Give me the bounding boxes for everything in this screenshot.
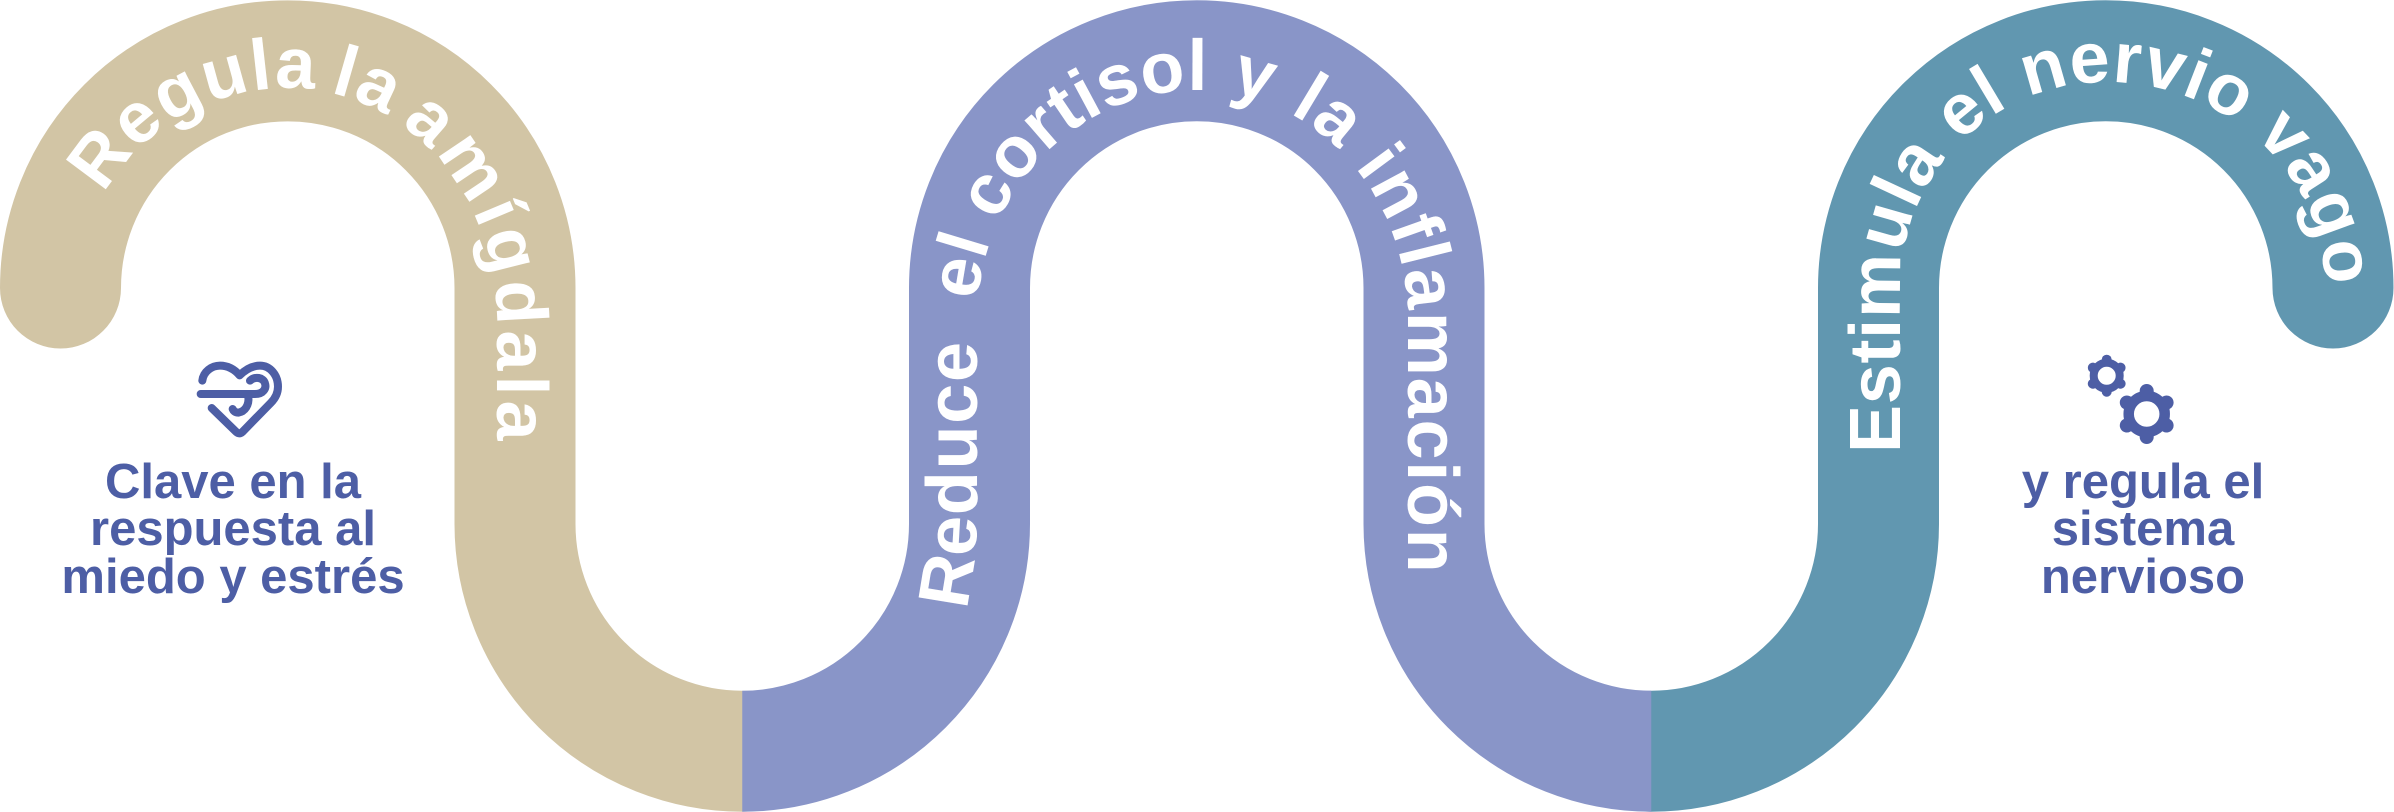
small gear xyxy=(2093,360,2121,392)
text block: y regula el sistema nervioso xyxy=(2022,455,2264,604)
text block: Clave en la respuesta al miedo y estrés: respuesta al xyxy=(90,502,376,556)
icon: heart with wind xyxy=(201,366,278,433)
ribbon segment: tan xyxy=(60,61,742,751)
text block: Clave en la respuesta al miedo y estrés: miedo y estrés xyxy=(61,550,405,604)
text block: Clave en la respuesta al miedo y estrés: Clave en la xyxy=(105,455,362,509)
ribbon segment: teal xyxy=(1651,61,2333,751)
curved heading: Estimula el nervio vago: Estimula el nervio vago xyxy=(1848,44,2362,448)
curved heading: Regula la amígdala: Regula la amígdala xyxy=(66,37,550,441)
text block: y regula el sistema nervioso: y regula el xyxy=(2022,455,2264,509)
text block: Clave en la respuesta al miedo y estrés xyxy=(61,455,405,604)
panel: step 1 ribbon, amygdala xyxy=(12,0,745,792)
curved heading: Reduce el cortisol y la inflamación: Reduce el cortisol y la inflamación xyxy=(918,38,1462,606)
text block: y regula el sistema nervioso: nervioso xyxy=(2041,550,2245,604)
large gear xyxy=(2127,391,2167,437)
panel: step 3 ribbon, vagus nerve xyxy=(1648,0,2394,792)
text block: y regula el sistema nervioso: sistema xyxy=(2052,502,2235,556)
ribbon segment: periwinkle xyxy=(742,61,1651,751)
icon: gears xyxy=(2093,360,2167,437)
